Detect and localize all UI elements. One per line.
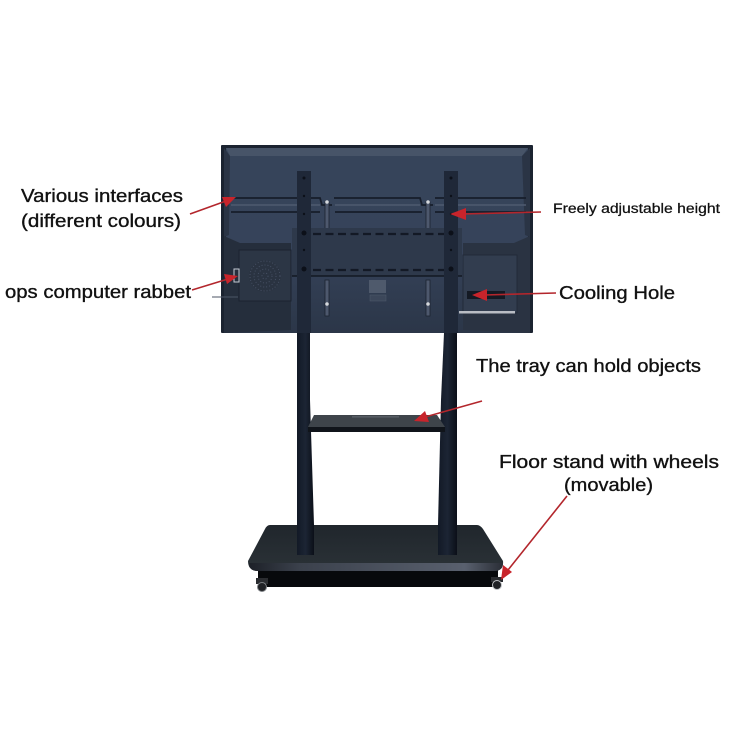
callout: tray: The tray can hold objects [476, 355, 701, 376]
callout: ops computer rabbet [5, 274, 238, 302]
callout: freely adjustable height: Freely adjustable height [553, 201, 720, 216]
callout: floor stand with wheels: (movable) [564, 474, 653, 495]
callout: freely adjustable height [450, 201, 720, 220]
ops computer box with speaker grille [234, 250, 291, 301]
upper posts with bolts [297, 171, 458, 333]
tray [308, 415, 445, 432]
callout: floor stand with wheels: Floor stand with wheels [499, 451, 719, 472]
base with wheels [248, 525, 503, 592]
callout: tray [414, 355, 701, 422]
wheels [256, 577, 503, 592]
centre label plate [369, 280, 386, 301]
callout: ops computer rabbet: ops computer rabbet [5, 281, 191, 302]
callout: various interfaces: (different colours) [21, 210, 181, 231]
vertical brackets [325, 202, 430, 316]
callout: cooling hole: Cooling Hole [559, 282, 675, 303]
callout: various interfaces: Various interfaces [21, 185, 183, 206]
callout: cooling hole [472, 282, 675, 303]
display back panel [221, 145, 533, 333]
mounting rails [224, 198, 526, 212]
callout: various interfaces [21, 185, 236, 231]
lower stand posts [297, 333, 457, 555]
cooling hole panel [459, 255, 517, 314]
callout: floor stand with wheels [499, 451, 719, 580]
mounting plate [292, 228, 462, 276]
